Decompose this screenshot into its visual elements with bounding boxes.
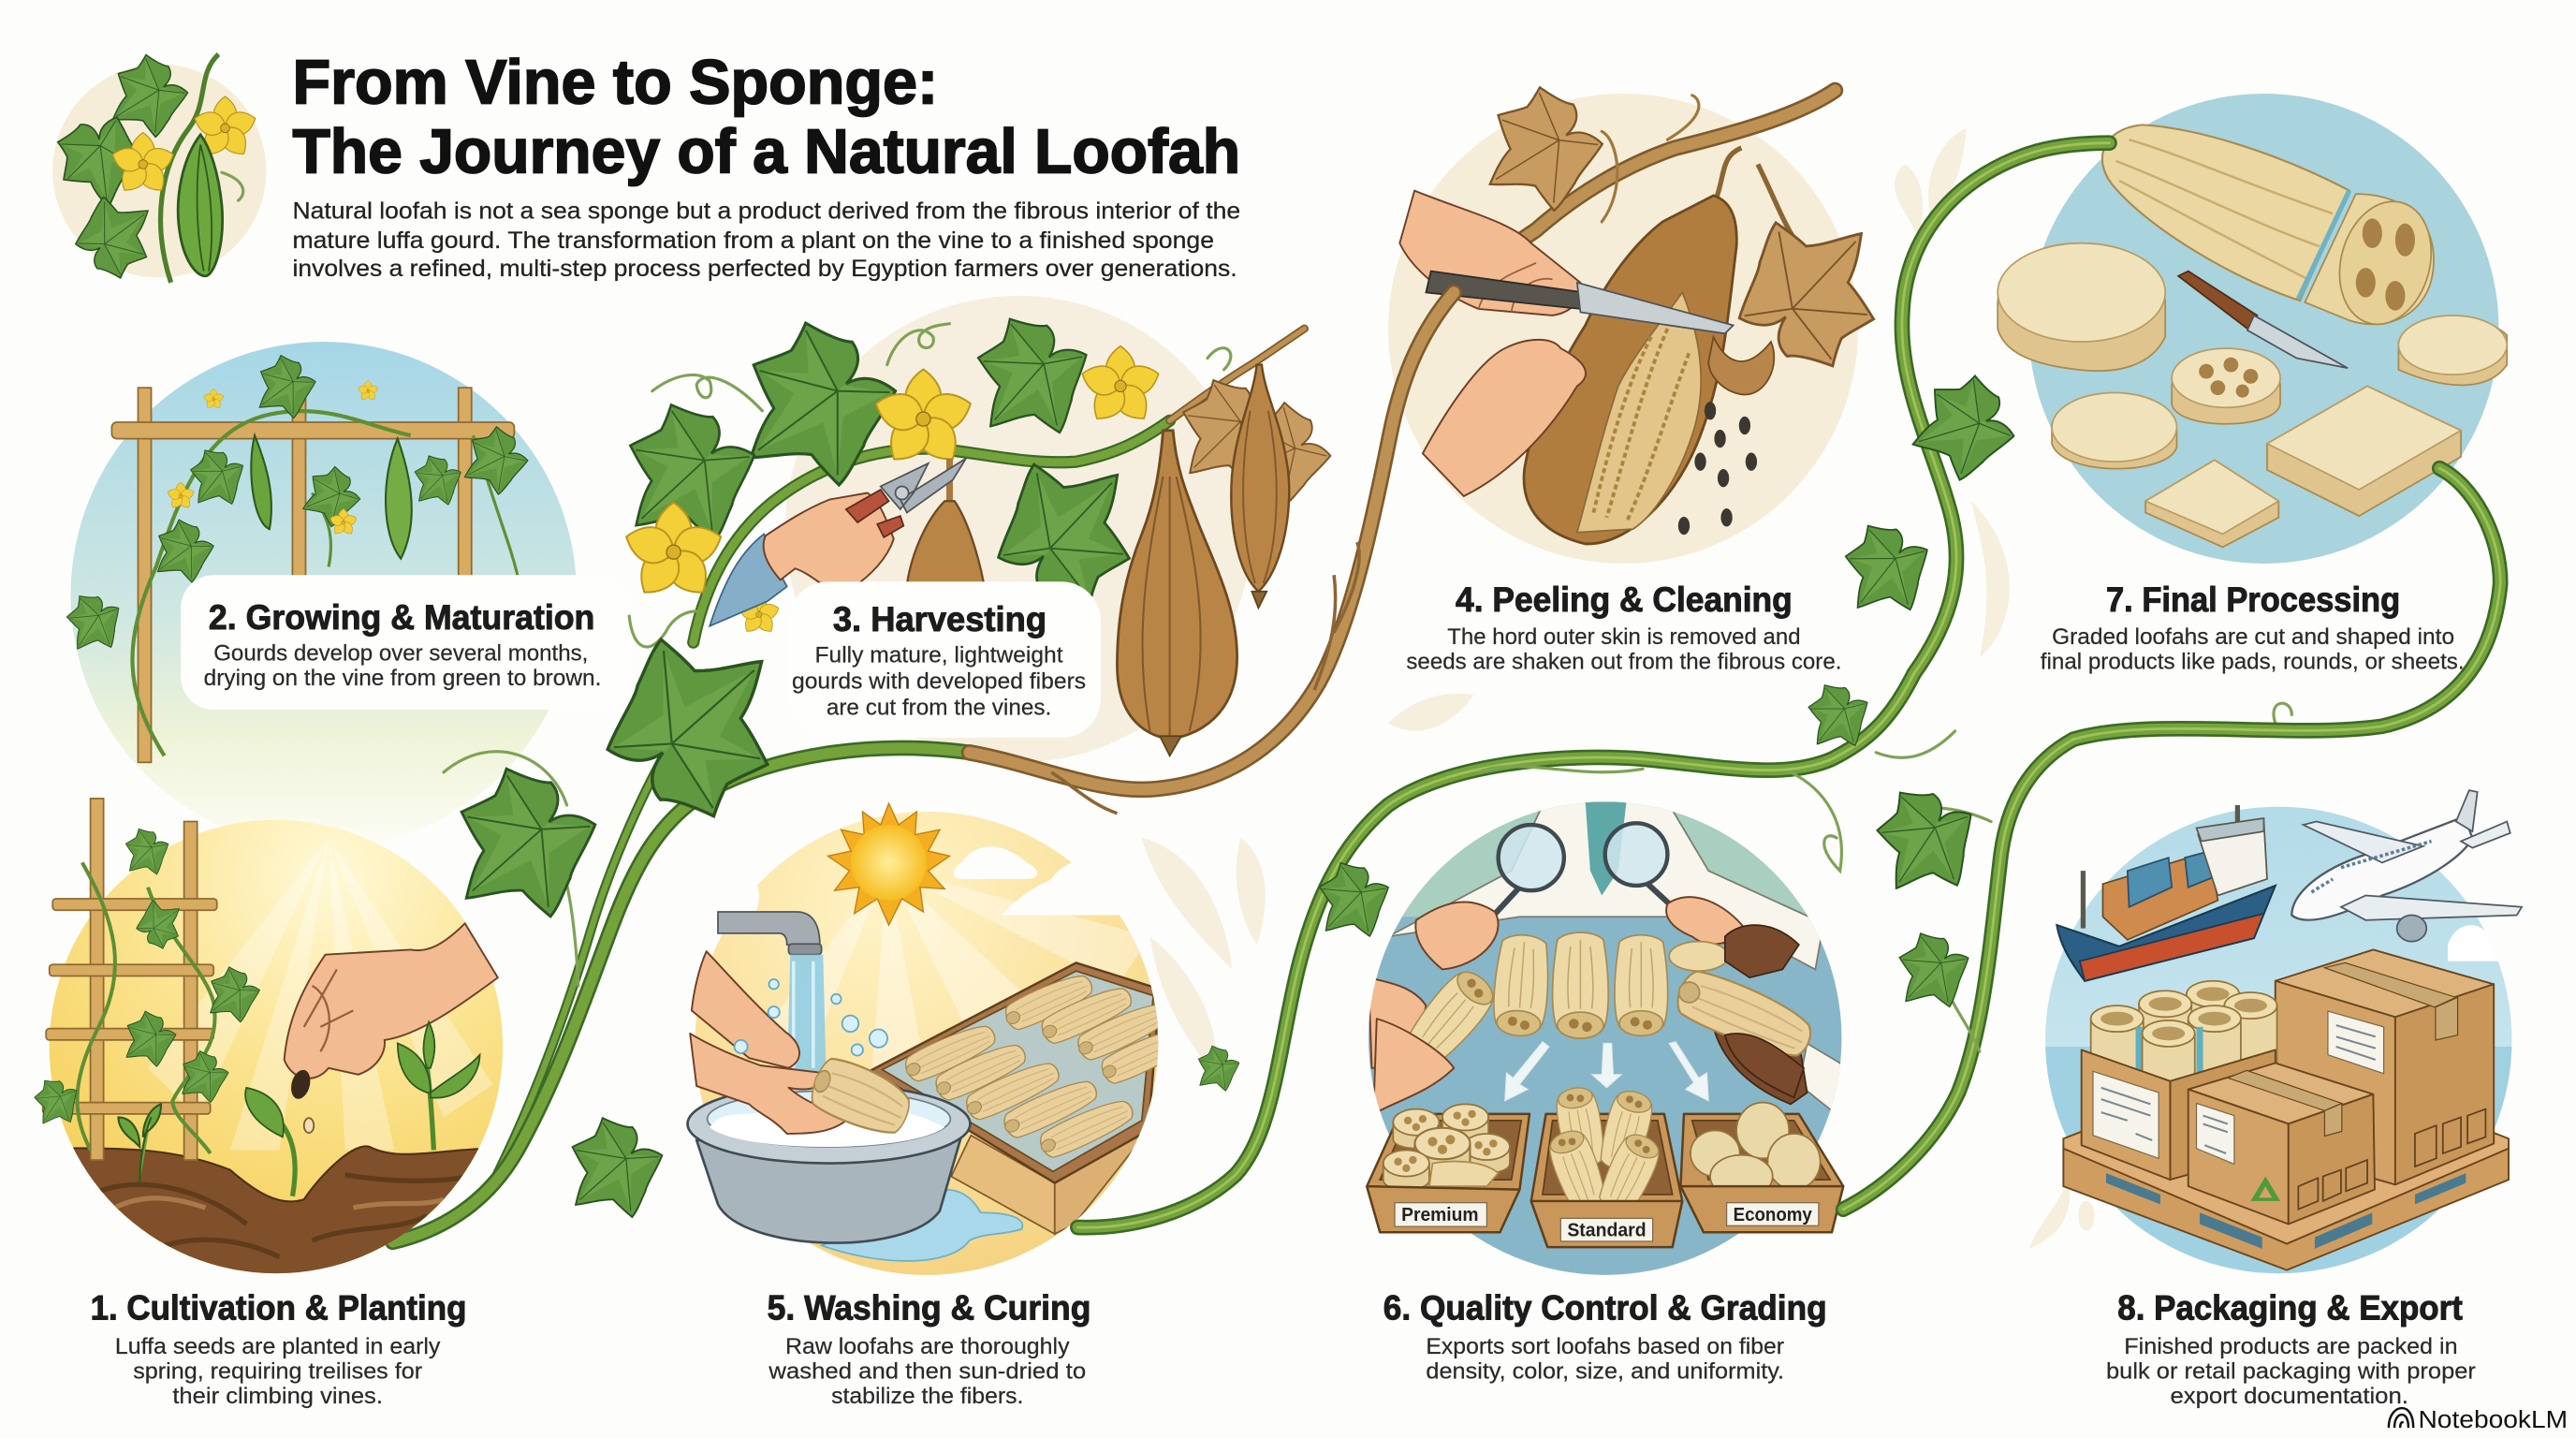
step 6 caption: density, color, size, and uniformity.: [1426, 1359, 1784, 1384]
lower hand and loofah: [690, 1034, 917, 1141]
intro text block: Natural loofah is not a sea sponge but a product derived from the fibrous interior of the: [292, 198, 1240, 224]
intro text block: involves a refined, multi-step process perfected by Egyption farmers over generations.: [292, 257, 1237, 282]
step 5 caption: [768, 1288, 1090, 1409]
step 5 caption: Raw loofahs are thoroughly: [785, 1335, 1070, 1359]
step 1 caption: Luffa seeds are planted in early: [115, 1335, 441, 1359]
step 3 caption: 3. Harvesting: [833, 600, 1046, 638]
upper arm: [692, 951, 799, 1068]
step 6 caption: 6. Quality Control & Grading: [1383, 1288, 1827, 1327]
tall box: [2276, 949, 2494, 1184]
step 3 caption: are cut from the vines.: [827, 696, 1051, 720]
drying tray: [871, 962, 1191, 1234]
step 4 caption: The hord outer skin is removed and: [1447, 625, 1801, 650]
economy basket: Economy: [1734, 1205, 1813, 1225]
step 4 caption: seeds are shaken out from the fibrous core.: [1406, 650, 1841, 674]
step 2 caption: [204, 598, 601, 691]
front box: [2188, 1064, 2375, 1224]
step 2 caption: drying on the vine from green to brown.: [204, 667, 601, 691]
step 5 caption: washed and then sun-dried to: [768, 1359, 1086, 1384]
second vine from step 5 to step 7: [1077, 143, 2448, 1227]
step 7 caption: 7. Final Processing: [2106, 580, 2400, 619]
step 1 caption: [91, 1288, 466, 1409]
step 1 caption: 1. Cultivation & Planting: [91, 1288, 466, 1327]
step 2 caption: Gourds develop over several months,: [213, 642, 588, 667]
NotebookLM watermark: NotebookLM: [2418, 1405, 2568, 1433]
premium basket: [1367, 1104, 1530, 1232]
step 3 caption: gourds with developed fibers: [792, 669, 1086, 694]
panel: step 6 quality control illustration: [1367, 801, 1848, 1275]
step 6 caption: Exports sort loofahs based on fiber: [1426, 1335, 1784, 1359]
panel: step 3 cream backdrop: [785, 296, 1251, 762]
step 4 caption: [1406, 580, 1841, 674]
step 2 caption: 2. Growing & Maturation: [209, 598, 594, 637]
standard basket: Standard: [1567, 1221, 1647, 1241]
economy basket: [1680, 1103, 1843, 1232]
step 8 caption: [2106, 1288, 2476, 1409]
recycle icon: [2250, 1177, 2280, 1201]
panel: step 7 final processing illustration: [1998, 94, 2507, 564]
main green and brown vine: [393, 292, 1454, 1242]
arrow: standard: [1592, 1043, 1621, 1088]
step 8 caption: 8. Packaging & Export: [2117, 1288, 2463, 1327]
title: From Vine to Sponge:: [292, 49, 938, 118]
step 7 caption: Graded loofahs are cut and shaped into: [2052, 625, 2454, 650]
standard basket: [1531, 1085, 1682, 1247]
pallet: [2063, 1051, 2509, 1270]
step 7 caption: final products like pads, rounds, or sheets.: [2041, 650, 2465, 674]
panel: step 8 packaging illustration: [2037, 790, 2530, 1284]
step 8 caption: export documentation.: [2170, 1385, 2408, 1409]
title: The Journey of a Natural Loofah: [292, 117, 1240, 186]
intro text block: mature luffa gourd. The transformation from a plant on the vine to a finished sponge: [292, 228, 1214, 254]
panel: step 3 harvesting vine and gourds: [621, 305, 1339, 756]
step 7 caption: [2041, 580, 2465, 674]
title: [292, 49, 1240, 186]
step 5 caption: 5. Washing & Curing: [768, 1288, 1090, 1327]
step 5 caption: stabilize the fibers.: [831, 1385, 1023, 1409]
step 2 text panel: [181, 575, 633, 710]
vine leaves: [456, 364, 2028, 1222]
step 1 caption: spring, requiring treilises for: [133, 1359, 422, 1384]
step 3 text panel: [788, 581, 1101, 738]
decorative cream swooshes: [263, 128, 2095, 1249]
panel: step 2 growing illustration: [66, 342, 577, 839]
step 8 caption: bulk or retail packaging with proper: [2106, 1359, 2476, 1384]
panel: header icon: [42, 52, 266, 283]
step 4 caption: 4. Peeling & Cleaning: [1456, 580, 1793, 619]
step 6 caption: [1383, 1288, 1827, 1384]
arrow: premium: [1505, 1042, 1549, 1101]
ship: [2056, 805, 2276, 981]
panel: step 4 peeling illustration: [1388, 83, 1883, 564]
step 3 caption: [792, 600, 1086, 720]
step 8 caption: Finished products are packed in: [2124, 1335, 2458, 1359]
step 1 caption: their climbing vines.: [172, 1385, 383, 1409]
third vine from step 7 to step 6: [1791, 468, 2500, 1210]
loofah crate: [2082, 981, 2277, 1180]
premium basket: Premium: [1401, 1205, 1479, 1225]
panel: step 5 washing illustration: [688, 803, 1191, 1275]
panel: step 1 cultivation illustration: [29, 799, 509, 1282]
airplane: [2291, 790, 2522, 942]
basin: [688, 1084, 970, 1243]
intro text block: [292, 198, 1240, 282]
step 3 caption: Fully mature, lightweight: [815, 643, 1063, 668]
arrow: economy: [1669, 1042, 1708, 1101]
